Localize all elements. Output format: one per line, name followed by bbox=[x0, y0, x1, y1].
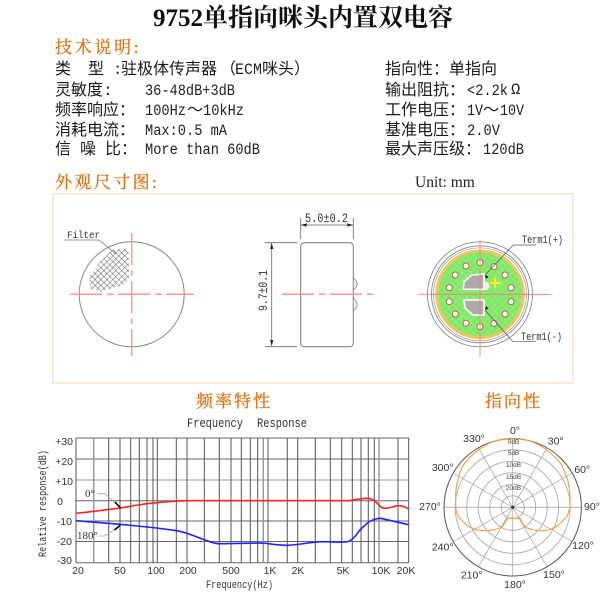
angle labels: 330° bbox=[463, 433, 485, 445]
x axis tick labels: 1K bbox=[264, 565, 276, 577]
specifications left column: 100Hz bbox=[145, 102, 186, 120]
x axis tick labels: 10K bbox=[372, 565, 390, 577]
angle labels bbox=[419, 425, 600, 591]
angle labels: 240° bbox=[432, 541, 454, 553]
x axis tick labels: 20 bbox=[72, 565, 84, 577]
heading: outline dimensions: 外观尺寸图: bbox=[55, 173, 159, 192]
x axis tick labels: 50 bbox=[114, 565, 126, 577]
x axis tick labels: 5K bbox=[337, 565, 349, 577]
chart title: Response bbox=[257, 417, 307, 431]
specifications right column: 基准电压： bbox=[385, 121, 465, 140]
specifications right column: 120dB bbox=[483, 141, 524, 159]
drawing: front view with filter: Filter bbox=[67, 230, 100, 242]
heading: technical specifications: 技术说明: bbox=[55, 38, 141, 57]
specifications right column: <2.2k bbox=[467, 82, 508, 100]
specifications left column: ECM bbox=[235, 61, 262, 79]
annotation: 0 degree curve bbox=[85, 488, 120, 508]
angle labels: 30° bbox=[548, 435, 564, 447]
y axis tick labels bbox=[55, 436, 73, 567]
curve: polar pattern bbox=[456, 439, 570, 531]
drawing: terminal view: Term1(+) bbox=[522, 235, 563, 247]
chart title bbox=[187, 417, 307, 431]
specifications left column: 驻极体传声器 bbox=[121, 60, 217, 79]
specifications left column: 灵敏度: bbox=[55, 81, 113, 100]
x axis tick labels: 20K bbox=[397, 565, 415, 577]
y axis tick labels: +20 bbox=[55, 456, 73, 468]
y axis tick labels: -30 bbox=[57, 555, 72, 567]
unit label: Unit: mm bbox=[415, 174, 475, 191]
angle labels: 90° bbox=[584, 501, 600, 513]
dB ring labels: 0dB bbox=[508, 439, 519, 446]
specifications left column: 10kHz bbox=[203, 102, 244, 120]
angle labels: 0° bbox=[510, 425, 520, 437]
specifications left column: 类 bbox=[55, 61, 71, 79]
panel: dimension drawings bbox=[53, 194, 573, 383]
specifications left column: More than 60dB bbox=[145, 141, 260, 159]
specifications left column: : bbox=[113, 61, 122, 79]
x axis tick labels: 100 bbox=[147, 565, 165, 577]
specifications right column: 工作电压： bbox=[385, 102, 465, 120]
specifications left column bbox=[55, 60, 310, 159]
specifications left column: 咪头） bbox=[262, 60, 310, 79]
specifications left column: ～ bbox=[187, 102, 203, 120]
specifications right column: 指向性：单指向 bbox=[385, 60, 497, 79]
dB ring labels: 10dB bbox=[506, 462, 521, 469]
specifications right column: 1V bbox=[467, 102, 484, 120]
angle labels: 180° bbox=[504, 579, 526, 591]
drawing: side view with dimensions: 5.0±0.2 bbox=[305, 212, 348, 226]
curve: 0 degrees response bbox=[76, 498, 409, 513]
y axis tick labels: -20 bbox=[57, 536, 72, 548]
specifications right column: 最大声压级： bbox=[385, 140, 481, 159]
specifications right column: Ω bbox=[511, 81, 520, 99]
specifications left column: 消耗电流： bbox=[55, 121, 135, 140]
x axis tick labels: 500 bbox=[222, 565, 240, 577]
annotation: 0 degree curve: 0° bbox=[85, 488, 95, 500]
specifications left column: 信 bbox=[55, 141, 71, 159]
specifications right column: 10V bbox=[500, 102, 525, 120]
chart title: Frequency bbox=[187, 417, 243, 431]
dB ring labels bbox=[506, 439, 521, 492]
title: 9752单指向咪头内置双电容 bbox=[153, 3, 453, 32]
specifications left column: Max:0.5 mA bbox=[145, 122, 228, 140]
angle labels: 270° bbox=[419, 501, 441, 513]
specifications left column: 型 bbox=[88, 60, 104, 79]
angle labels: 150° bbox=[543, 569, 565, 581]
y axis label: Relative response(dB) bbox=[38, 450, 50, 557]
specifications left column: 比： bbox=[105, 140, 137, 159]
drawing: side view with dimensions: 9.7±0.1 bbox=[257, 270, 271, 311]
dB ring labels: 20dB bbox=[506, 485, 521, 492]
chart: polar directivity bbox=[419, 425, 600, 591]
y axis tick labels: +10 bbox=[55, 476, 73, 488]
specifications right column: 输出阻抗： bbox=[385, 81, 465, 100]
angle labels: 120° bbox=[572, 540, 594, 552]
drawing: front view with filter bbox=[64, 230, 194, 356]
y axis tick labels: 0 bbox=[57, 496, 63, 508]
x axis tick labels bbox=[72, 565, 415, 577]
specifications left column: 频率响应： bbox=[55, 102, 135, 120]
annotation: 180 degree curve bbox=[77, 525, 120, 542]
curve: 180 degrees response bbox=[76, 518, 409, 545]
specifications left column: 噪 bbox=[80, 141, 96, 159]
specifications left column: 36-48dB+3dB bbox=[145, 82, 235, 100]
drawing: terminal view: Term1(-) bbox=[521, 332, 562, 344]
heading: frequency characteristics: 频率特性 bbox=[196, 392, 272, 411]
chart: frequency response bbox=[38, 417, 415, 592]
angle labels: 60° bbox=[574, 464, 590, 476]
dB ring labels: 15dB bbox=[506, 474, 521, 481]
x axis tick labels: 200 bbox=[179, 565, 197, 577]
drawing: terminal view bbox=[418, 235, 563, 357]
specifications right column bbox=[385, 60, 525, 159]
specifications left column: （ bbox=[220, 60, 236, 79]
dB ring labels: 5dB bbox=[508, 450, 519, 457]
y axis tick labels: -10 bbox=[57, 516, 72, 528]
drawing: side view with dimensions bbox=[257, 212, 377, 347]
angle labels: 300° bbox=[432, 462, 454, 474]
heading: directivity: 指向性 bbox=[485, 392, 542, 411]
specifications right column: ～ bbox=[483, 102, 499, 120]
specifications right column: 2.0V bbox=[467, 122, 501, 140]
annotation: 180 degree curve: 180° bbox=[77, 530, 98, 542]
x axis tick labels: 2K bbox=[292, 565, 304, 577]
x axis label: Frequency(Hz) bbox=[206, 580, 273, 592]
angle labels: 210° bbox=[461, 569, 483, 581]
y axis tick labels: +30 bbox=[55, 436, 73, 448]
